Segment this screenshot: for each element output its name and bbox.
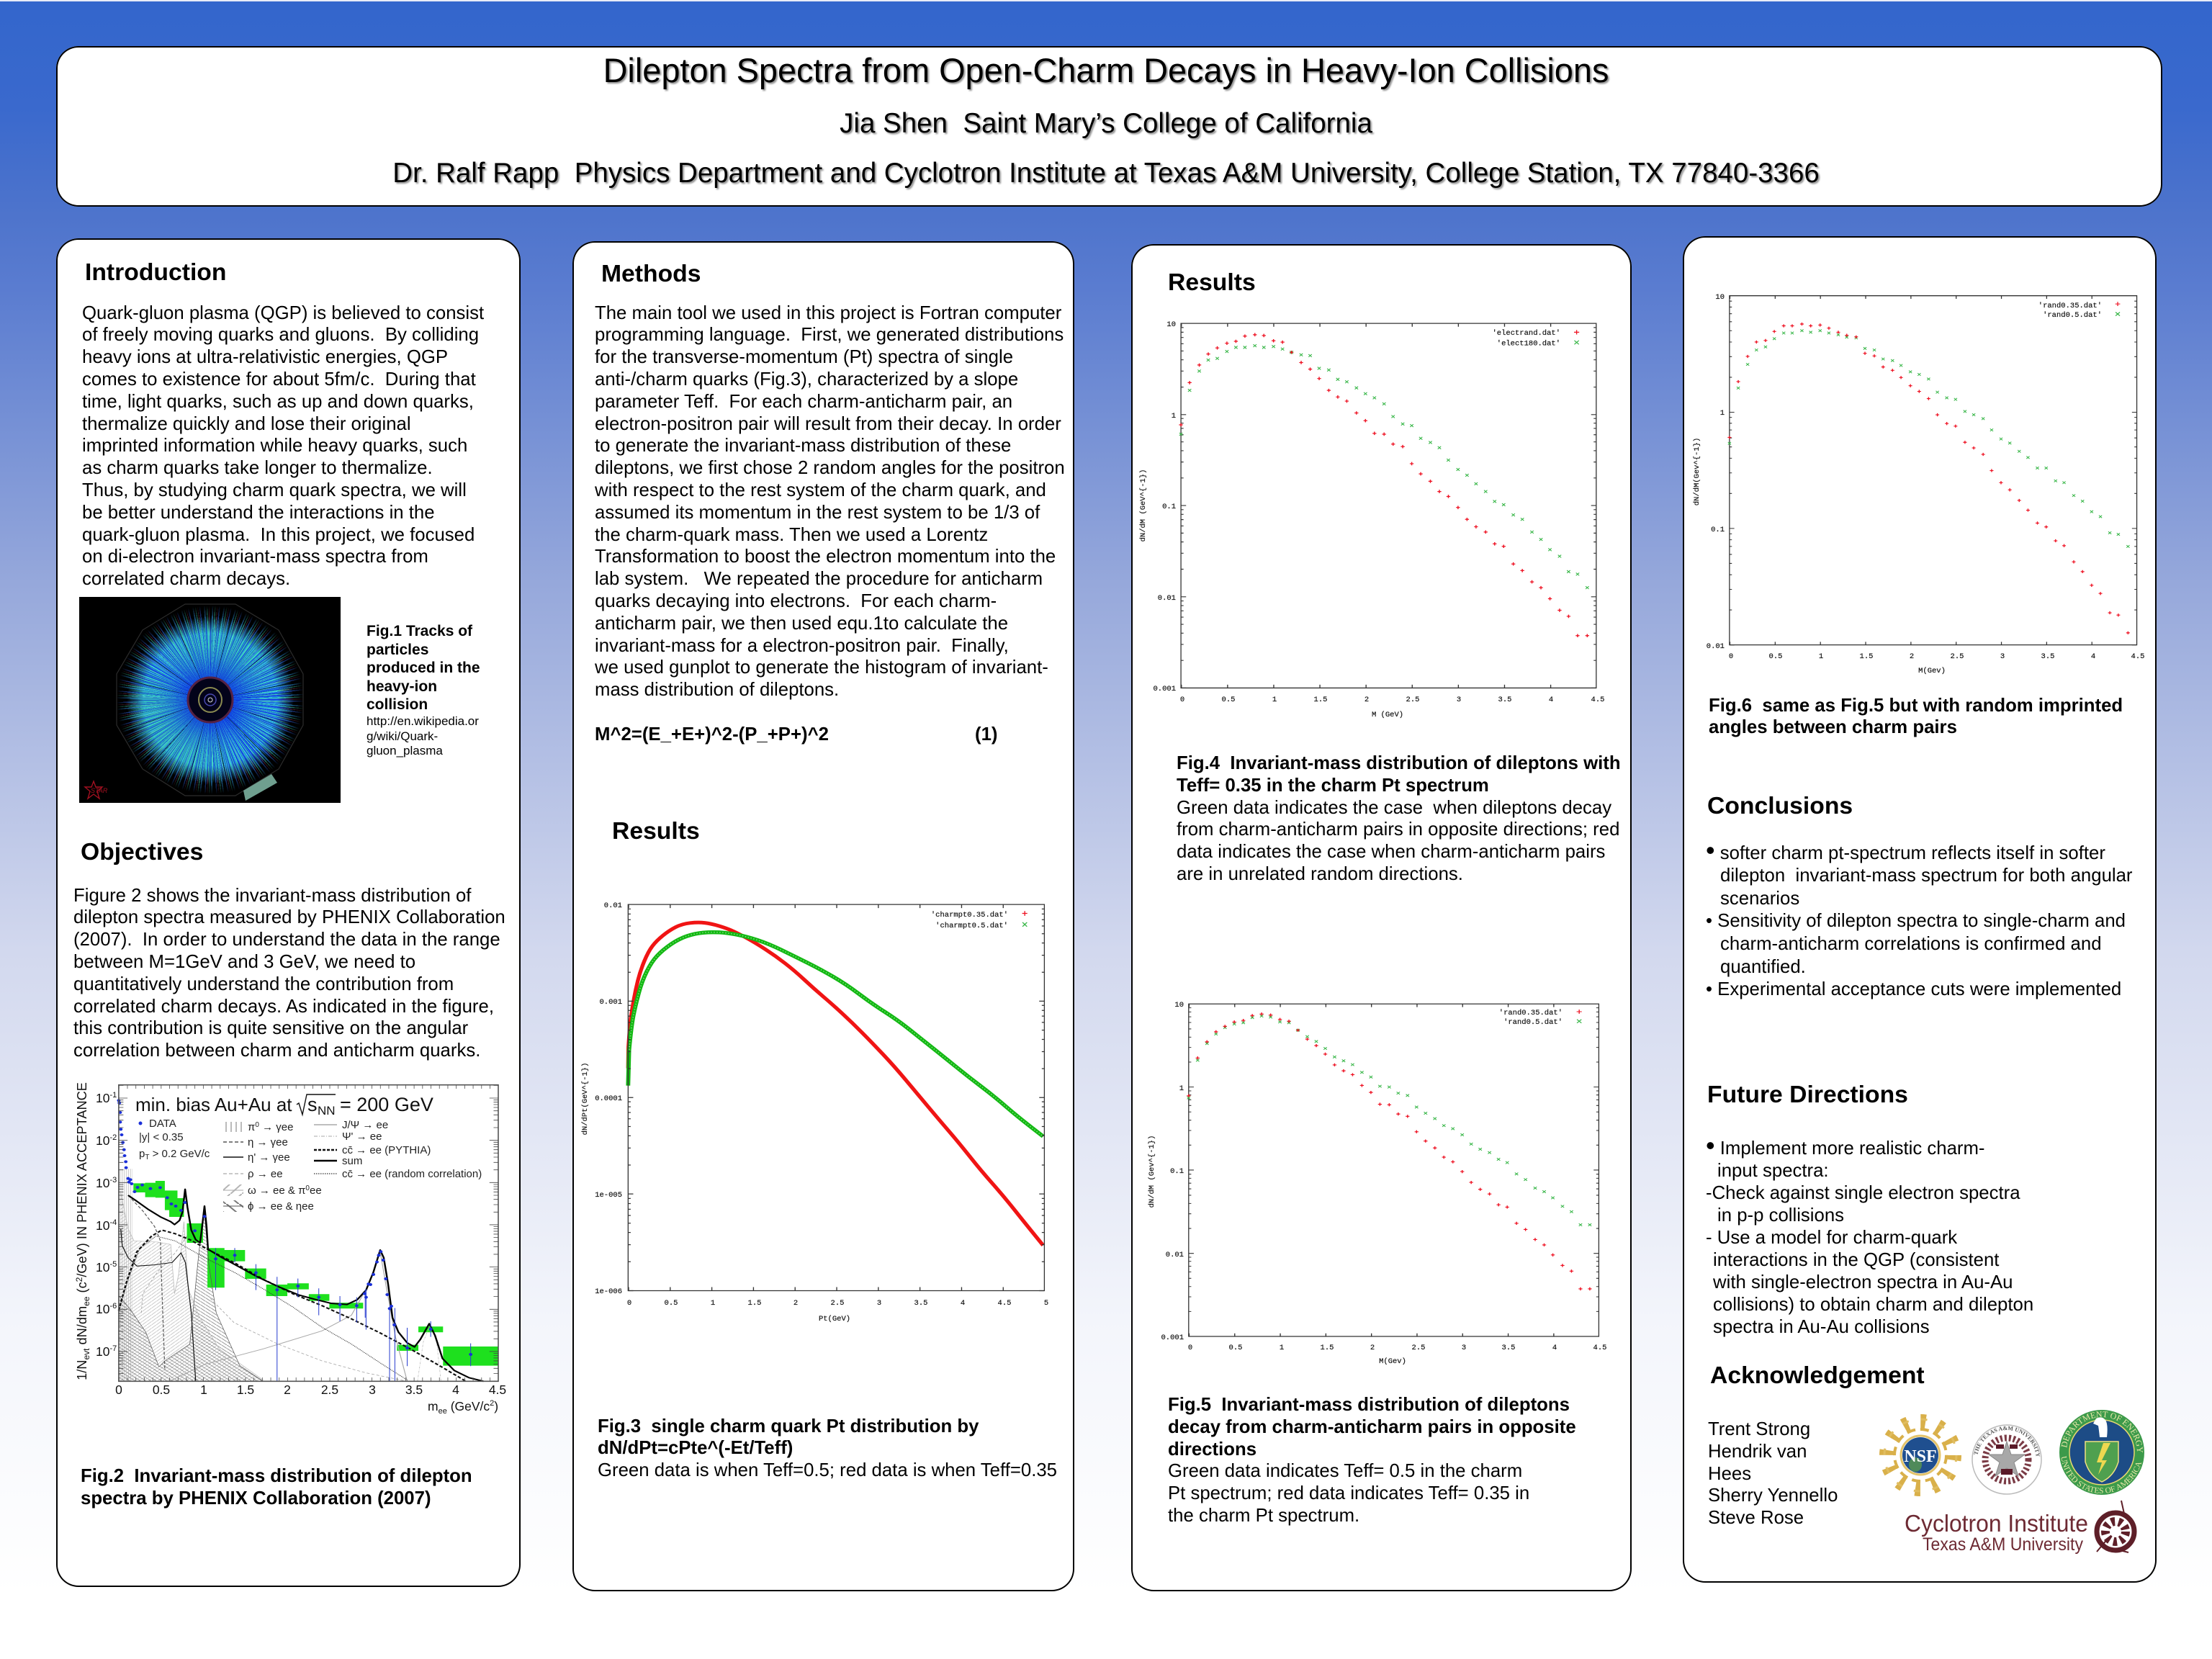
x axis tick labels: 2.5 bbox=[321, 1382, 338, 1397]
y axis tick labels: 10 bbox=[96, 1344, 109, 1359]
figure 6 caption: Fig.6 same as Fig.5 but with random imprinted angles between charm pairs bbox=[1709, 696, 2123, 737]
conclusions list: quantified. bbox=[1720, 957, 1806, 977]
legend: 'rand0.5.dat' bbox=[1503, 1018, 1563, 1027]
conclusions list: scenarios bbox=[1720, 889, 1799, 909]
x axis tick labels: 2.5 bbox=[831, 1299, 844, 1308]
author: Jia Shen Saint Mary’s College of California bbox=[840, 108, 1372, 139]
x axis tick labels: 3 bbox=[2000, 652, 2005, 661]
detector outline, hub and STAR logo: STAR bbox=[91, 787, 108, 794]
heading: Conclusions: Conclusions bbox=[1707, 792, 1853, 819]
figure 4: invariant-mass chart bbox=[1139, 320, 1604, 719]
future directions list: • Implement more realistic charm- bbox=[1706, 1130, 1985, 1160]
x axis title: 2 bbox=[490, 1399, 494, 1408]
y axis tick labels: -7 bbox=[109, 1344, 117, 1353]
introduction text: Quark-gluon plasma (QGP) is believed to consist of freely moving quarks and gluons. By colliding heavy ions at ultra-relativistic energies, QGP comes to existence for about 5fm/c. During that time, light quarks, such as up and down quarks, thermalize quickly and lose their original imprinted information while heavy quarks, such as charm quarks take longer to thermalize. Thus, by studying charm quark spectra, we will be better understand the interactions in the quark-gluon plasma. In this project, we focused on di-electron invariant-mass spectra from correlated charm decays. bbox=[82, 303, 484, 589]
plot data bbox=[1730, 296, 2137, 645]
y axis tick labels bbox=[1161, 1001, 1184, 1342]
particle track burst bbox=[117, 606, 302, 793]
legend: hadronic decays: 0 bbox=[255, 1121, 259, 1129]
x axis tick labels: 0 bbox=[627, 1299, 631, 1308]
plot data bbox=[1181, 323, 1596, 688]
y axis tick labels: 10 bbox=[96, 1091, 109, 1105]
y axis tick labels: 10 bbox=[96, 1218, 109, 1233]
icon: Department of Energy seal: DEPARTMENT OF ENERGY bbox=[2061, 1411, 2143, 1453]
legend: data selection: p bbox=[139, 1148, 145, 1160]
axis titles: dN/dM(Gev^{-1}) bbox=[1693, 438, 1701, 505]
x axis title: (GeV/c bbox=[447, 1399, 490, 1413]
legend: 'rand0.35.dat' bbox=[2038, 302, 2102, 310]
legend: hadronic decays: ee bbox=[310, 1184, 322, 1197]
x axis tick labels: 0.5 bbox=[1229, 1344, 1242, 1352]
x axis tick labels: 5 bbox=[1044, 1299, 1048, 1308]
title: Dilepton Spectra from Open-Charm Decays in Heavy-Ion Collisions bbox=[603, 52, 1609, 89]
icon: Texas A&M seal bbox=[1972, 1424, 2042, 1495]
y axis tick labels: 0.001 bbox=[599, 998, 622, 1007]
y axis tick labels: 0.01 bbox=[1158, 594, 1176, 603]
heading: Acknowledgement: Acknowledgement bbox=[1710, 1362, 1925, 1389]
detector outline, hub and STAR logo bbox=[84, 603, 304, 801]
x axis tick labels: 0 bbox=[1188, 1344, 1192, 1352]
y axis tick labels: -1 bbox=[109, 1091, 117, 1100]
x axis tick labels: 1 bbox=[1819, 652, 1823, 661]
figure 3: single charm quark Pt chart bbox=[581, 902, 1048, 1323]
y axis tick labels: 10 bbox=[1715, 293, 1725, 302]
x axis tick labels: 2 bbox=[284, 1382, 291, 1397]
conclusions list bbox=[1706, 835, 2133, 999]
x axis tick labels: 0.5 bbox=[153, 1382, 170, 1397]
y axis title: evt bbox=[81, 1348, 91, 1360]
x axis tick labels: 4.5 bbox=[1591, 696, 1604, 704]
x axis tick labels: 3.5 bbox=[405, 1382, 423, 1397]
heading: Objectives: Objectives bbox=[81, 838, 203, 866]
x axis tick labels: 2.5 bbox=[1406, 696, 1419, 704]
y axis title: 1/N bbox=[75, 1360, 89, 1380]
y axis tick labels: 1 bbox=[1720, 409, 1725, 418]
conclusions list: • softer charm pt-spectrum reflects itself in softer bbox=[1706, 835, 2105, 865]
legend: 'electrand.dat' bbox=[1492, 329, 1560, 338]
logo: Cyclotron Institute bbox=[1905, 1501, 2134, 1555]
legend: 'rand0.5.dat' bbox=[2043, 311, 2102, 320]
icon: Department of Energy seal bbox=[2059, 1410, 2144, 1495]
x axis tick labels bbox=[115, 1382, 506, 1397]
heading: Future Directions: Future Directions bbox=[1707, 1081, 1908, 1108]
x axis tick labels: 0.5 bbox=[1769, 652, 1782, 661]
plot data bbox=[1189, 1004, 1599, 1336]
x axis tick labels: 3.5 bbox=[2041, 652, 2054, 661]
figure 3 caption: Fig.3 single charm quark Pt distribution by dN/dPt=cPte^(-Et/Teff) Green data is when Teff=0.5; red data is when Teff=0.35 bbox=[598, 1416, 1057, 1480]
legend: hadronic decays: η → γee bbox=[248, 1136, 288, 1148]
y axis tick labels: -5 bbox=[109, 1260, 117, 1269]
panel: methods bbox=[572, 241, 1074, 1591]
legend: hadronic decays bbox=[223, 1121, 322, 1213]
future directions list: with single-electron spectra in Au-Au bbox=[1713, 1272, 2013, 1292]
x axis tick labels: 0.5 bbox=[1222, 696, 1235, 704]
x axis tick labels: 4 bbox=[452, 1382, 459, 1397]
y axis tick labels bbox=[1153, 320, 1176, 693]
y axis tick labels: -6 bbox=[109, 1302, 117, 1310]
x axis tick labels: 3 bbox=[1457, 696, 1461, 704]
plot data bbox=[117, 1084, 499, 1382]
panel: conclusions and acknowledgement bbox=[1683, 236, 2157, 1583]
future directions list: collisions) to obtain charm and dilepton bbox=[1713, 1295, 2033, 1315]
x axis tick labels: 4 bbox=[961, 1299, 965, 1308]
y axis tick labels: 10 bbox=[96, 1260, 109, 1274]
x axis tick labels: 1 bbox=[711, 1299, 715, 1308]
legend: charm and sum: cc̄ → ee (random correlation) bbox=[342, 1168, 482, 1180]
logo: Cyclotron Institute: Texas A&M University bbox=[1923, 1534, 2083, 1555]
future directions list: input spectra: bbox=[1717, 1161, 1829, 1181]
y axis tick labels: 10 bbox=[1166, 320, 1176, 329]
figure 5 caption: Fig.5 Invariant-mass distribution of dileptons decay from charm-anticharm pairs in opposite directions Green data indicates Teff= 0.5 in the charm Pt spectrum; red data indicates Teff= 0.35 in the charm Pt spectrum. bbox=[1168, 1395, 1576, 1526]
icon: NSF logo: NSF bbox=[1904, 1447, 1937, 1466]
legend: data selection bbox=[138, 1118, 210, 1161]
y axis title: dN/dm bbox=[75, 1306, 89, 1349]
x axis tick labels: 0.5 bbox=[665, 1299, 678, 1308]
equation number: (1) bbox=[975, 724, 997, 745]
x axis tick labels: 3 bbox=[1462, 1344, 1466, 1352]
y axis tick labels: -4 bbox=[109, 1218, 117, 1227]
x axis tick labels: 3 bbox=[877, 1299, 881, 1308]
y axis tick labels: 10 bbox=[96, 1176, 109, 1190]
axis titles: M(Gev) bbox=[1379, 1357, 1406, 1366]
figure 6: random angle invariant-mass chart bbox=[1693, 293, 2144, 675]
x axis tick labels: 4.5 bbox=[1593, 1344, 1606, 1352]
legend: data selection: > 0.2 GeV/c bbox=[149, 1148, 210, 1160]
x axis tick labels: 2 bbox=[1364, 696, 1369, 704]
figure 2 caption: Fig.2 Invariant-mass distribution of dilepton spectra by PHENIX Collaboration (2007) bbox=[81, 1466, 472, 1509]
y axis tick labels: 0.0001 bbox=[595, 1094, 622, 1103]
axis titles: dN/dM (Gev^{-1}) bbox=[1148, 1136, 1156, 1208]
y axis tick labels bbox=[96, 1091, 117, 1359]
y axis tick labels: 1 bbox=[1179, 1084, 1184, 1093]
axis titles: M (GeV) bbox=[1372, 711, 1403, 719]
y axis tick labels: 0.001 bbox=[1153, 685, 1176, 693]
future directions list: in p-p collisions bbox=[1717, 1205, 1844, 1226]
y axis tick labels: 1e-005 bbox=[595, 1191, 622, 1200]
conclusions list: charm-anticharm correlations is confirmed and bbox=[1720, 934, 2102, 954]
legend: charm and sum: J/Ψ → ee bbox=[342, 1119, 388, 1131]
x axis tick labels: 4 bbox=[1552, 1344, 1557, 1352]
x axis tick labels: 4.5 bbox=[2131, 652, 2144, 661]
x axis tick labels: 4 bbox=[1549, 696, 1553, 704]
figure 1 source link: http://en.wikipedia.or g/wiki/Quark- gluon_plasma bbox=[367, 714, 479, 757]
axis titles bbox=[1693, 438, 1946, 675]
future directions list: - Use a model for charm-quark bbox=[1706, 1228, 1957, 1248]
sponsor logos bbox=[1879, 1410, 2144, 1555]
y axis tick labels: 0.1 bbox=[1170, 1167, 1184, 1176]
x axis title: ee bbox=[439, 1407, 447, 1416]
y axis tick labels bbox=[595, 902, 622, 1296]
future directions list: interactions in the QGP (consistent bbox=[1713, 1250, 1999, 1270]
legend bbox=[2038, 302, 2102, 320]
x axis tick labels: 1.5 bbox=[237, 1382, 254, 1397]
y axis tick labels: 0.01 bbox=[1166, 1251, 1184, 1259]
y axis tick labels: 10 bbox=[96, 1302, 109, 1316]
panel: introduction and objectives bbox=[56, 238, 521, 1587]
legend: hadronic decays: π bbox=[248, 1121, 255, 1133]
legend: hadronic decays: ρ → ee bbox=[248, 1168, 283, 1180]
x axis tick labels: 1 bbox=[1272, 696, 1277, 704]
legend: charm and sum: sum bbox=[342, 1155, 362, 1167]
x axis tick labels: 2 bbox=[1370, 1344, 1375, 1352]
x axis tick labels: 4 bbox=[2091, 652, 2095, 661]
conclusions list: • Sensitivity of dilepton spectra to single-charm and bbox=[1706, 911, 2126, 931]
legend: hadronic decays: ϕ → ee & ηee bbox=[248, 1200, 314, 1213]
chart title energy: s bbox=[307, 1094, 317, 1115]
plot data bbox=[628, 904, 1044, 1290]
logo: Cyclotron Institute: Cyclotron Institute bbox=[1905, 1510, 2088, 1537]
x axis title: ) bbox=[494, 1399, 498, 1413]
legend: 'rand0.35.dat' bbox=[1499, 1009, 1563, 1017]
legend: data selection: T bbox=[145, 1154, 149, 1161]
axis titles: Pt(GeV) bbox=[819, 1315, 850, 1323]
axis titles: dN/dPt(GeV^{-1}) bbox=[581, 1063, 590, 1135]
x axis tick labels: 2 bbox=[1910, 652, 1914, 661]
chart title energy: = 200 GeV bbox=[340, 1094, 433, 1115]
heading: Results: Results bbox=[612, 817, 700, 845]
x axis tick labels: 0 bbox=[115, 1382, 122, 1397]
x axis tick labels: 3.5 bbox=[1502, 1344, 1515, 1352]
acknowledged names: Trent Strong Hendrik van Hees Sherry Yennello Steve Rose bbox=[1708, 1419, 1838, 1528]
chart title: min. bias Au+Au at bbox=[135, 1094, 292, 1115]
x axis tick labels bbox=[1180, 696, 1604, 704]
x axis tick labels: 1 bbox=[1280, 1344, 1284, 1352]
legend: charm and sum bbox=[314, 1119, 482, 1180]
x axis title: m bbox=[428, 1399, 439, 1413]
icon: NSF logo bbox=[1884, 1419, 1956, 1491]
x axis tick labels: 1.5 bbox=[1314, 696, 1327, 704]
objectives text: Figure 2 shows the invariant-mass distribution of dilepton spectra measured by PHENIX Collaboration (2007). In order to understand the data in the range between M=1GeV and 3 GeV, we need to quantitatively understand the contribution from correlated charm decays. As indicated in the figure, this contribution is quite sensitive on the angular correlation between charm and anticharm quarks. bbox=[73, 886, 505, 1061]
figure 1 caption: Fig.1 Tracks of particles produced in the heavy-ion collision bbox=[367, 623, 480, 713]
y axis title: ee bbox=[81, 1296, 91, 1306]
conclusions list: • Experimental acceptance cuts were implemented bbox=[1706, 979, 2121, 999]
legend: hadronic decays: → γee bbox=[259, 1121, 293, 1133]
x axis tick labels: 1.5 bbox=[1860, 652, 1873, 661]
axis titles: dN/dM (GeV^{-1}) bbox=[1139, 469, 1148, 541]
y axis tick labels: 10 bbox=[96, 1133, 109, 1148]
x axis tick labels: 3 bbox=[369, 1382, 376, 1397]
legend bbox=[1499, 1009, 1563, 1027]
future directions list bbox=[1706, 1130, 2033, 1337]
y axis tick labels: 0.01 bbox=[1707, 642, 1725, 651]
icon: Texas A&M seal: THE TEXAS A&M UNIVERSITY SYSTEM bbox=[1974, 1426, 2041, 1457]
y axis tick labels: 0.1 bbox=[1711, 526, 1725, 534]
x axis tick labels: 0 bbox=[1729, 652, 1733, 661]
x axis tick labels: 0 bbox=[1180, 696, 1184, 704]
legend: data selection: |y| < 0.35 bbox=[139, 1131, 184, 1143]
legend: 'elect180.dat' bbox=[1497, 340, 1560, 349]
x axis tick labels: 1 bbox=[200, 1382, 207, 1397]
y axis tick labels: 0.1 bbox=[1162, 503, 1176, 511]
y axis tick labels: 0.01 bbox=[604, 902, 622, 910]
x axis tick labels bbox=[627, 1299, 1048, 1308]
y axis tick labels: 0.001 bbox=[1161, 1334, 1184, 1342]
x axis tick labels bbox=[1188, 1344, 1606, 1352]
header panel bbox=[56, 46, 2162, 207]
conclusions list: dilepton invariant-mass spectrum for both angular bbox=[1720, 866, 2133, 886]
y axis tick labels: -2 bbox=[109, 1133, 117, 1142]
legend: charm and sum: cc̄ → ee (PYTHIA) bbox=[342, 1144, 431, 1156]
x axis tick labels bbox=[1729, 652, 2144, 661]
axis titles bbox=[1148, 1136, 1406, 1366]
legend bbox=[1492, 329, 1560, 349]
legend: hadronic decays: 0 bbox=[305, 1184, 310, 1192]
figure 5: invariant-mass chart bbox=[1148, 1001, 1606, 1366]
axis titles bbox=[1139, 469, 1403, 719]
methods text: The main tool we used in this project is Fortran computer programming language. First, we generated distributions for the transverse-momentum (Pt) spectra of single anti-/charm quarks (Fig.3), characterized by a slope parameter Teff. For each charm-anticharm pair, an electron-positron pair will result from their decay. In order to generate the invariant-mass distribution of these dileptons, we first chose 2 random angles for the positron with respect to the rest system of the charm quark, and assumed its momentum in the rest system to be 1/3 of the charm-quark mass. Then we used a Lorentz Transformation to boost the electron momentum into the lab system. We repeated the procedure for anticharm quarks decaying into electrons. For each charm- anticharm pair, we then used equ.1to calculate the invariant-mass for a electron-positron pair. Finally, we used gunplot to generate the histogram of invariant- mass distribution of dileptons. bbox=[595, 303, 1065, 700]
y axis title: /GeV) IN PHENIX ACCEPTANCE bbox=[75, 1082, 89, 1277]
advisor and affiliation: Dr. Ralf Rapp Physics Department and Cyclotron Institute at Texas A&M University, College Station, TX 77840-3366 bbox=[392, 158, 1820, 189]
x axis tick labels: 4.5 bbox=[998, 1299, 1011, 1308]
figure 2: PHENIX invariant-mass spectrum chart bbox=[74, 1082, 506, 1416]
legend: hadronic decays: η' → γee bbox=[248, 1151, 290, 1164]
legend: hadronic decays: ω → ee & π bbox=[248, 1184, 305, 1197]
y axis tick labels: 1e-006 bbox=[595, 1287, 622, 1296]
heading: Results: Results bbox=[1168, 269, 1256, 296]
axis titles bbox=[581, 1063, 850, 1323]
y axis tick labels: 10 bbox=[1174, 1001, 1184, 1010]
chart title energy: NN bbox=[318, 1104, 336, 1118]
heading: Introduction: Introduction bbox=[85, 258, 226, 286]
legend: charm and sum: Ψ' → ee bbox=[342, 1130, 382, 1143]
panel: results bbox=[1131, 244, 1632, 1591]
x axis tick labels: 2.5 bbox=[1412, 1344, 1425, 1352]
future directions list: spectra in Au-Au collisions bbox=[1713, 1317, 1930, 1337]
legend: data selection: DATA bbox=[149, 1118, 176, 1130]
x axis tick labels: 4.5 bbox=[489, 1382, 506, 1397]
figure 4 caption: Fig.4 Invariant-mass distribution of dileptons with Teff= 0.35 in the charm Pt spectrum Green data indicates the case when dileptons decay from charm-anticharm pairs in opposite directions; red data indicates the case when charm-anticharm pairs are in unrelated random directions. bbox=[1177, 753, 1621, 884]
icon: Department of Energy seal: UNITED STATES OF AMERICA bbox=[2061, 1456, 2141, 1493]
legend: 'charmpt0.5.dat' bbox=[935, 922, 1008, 930]
y axis title: (c bbox=[75, 1282, 89, 1297]
x axis tick labels: 2.5 bbox=[1951, 652, 1964, 661]
y axis tick labels: -3 bbox=[109, 1176, 117, 1184]
figure 1: particle tracks image bbox=[79, 597, 341, 803]
y axis tick labels: 1 bbox=[1172, 412, 1176, 421]
x axis tick labels: 1.5 bbox=[748, 1299, 761, 1308]
x axis tick labels: 3.5 bbox=[1498, 696, 1511, 704]
future directions list: -Check against single electron spectra bbox=[1706, 1183, 2020, 1203]
y axis title: 2 bbox=[74, 1277, 84, 1282]
x axis tick labels: 2 bbox=[793, 1299, 798, 1308]
axis titles: M(Gev) bbox=[1918, 667, 1946, 675]
x axis tick labels: 3.5 bbox=[914, 1299, 927, 1308]
legend: 'charmpt0.35.dat' bbox=[931, 911, 1008, 920]
x axis tick labels: 1.5 bbox=[1321, 1344, 1334, 1352]
chart title energy bbox=[297, 1094, 433, 1118]
heading: Methods: Methods bbox=[601, 260, 701, 287]
y axis tick labels bbox=[1707, 293, 1725, 651]
equation 1: M^2=(E_+E+)^2-(P_+P+)^2 bbox=[595, 724, 829, 745]
legend bbox=[931, 911, 1008, 930]
